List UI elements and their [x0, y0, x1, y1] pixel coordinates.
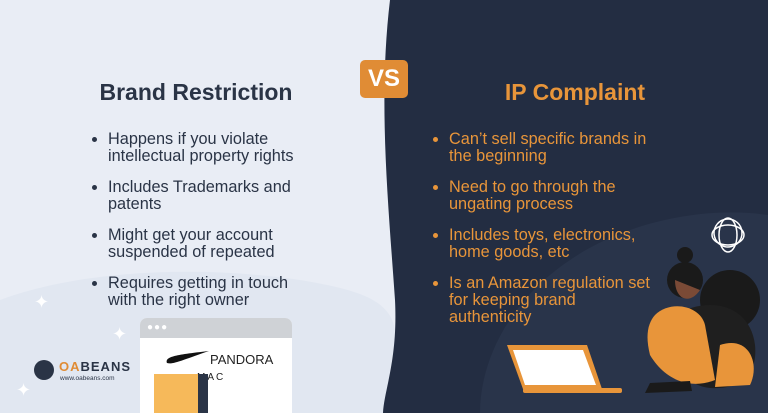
list: ip complaint points: home goods, etc — [449, 243, 569, 261]
logo — [34, 359, 131, 382]
list: ip complaint points: Need to go through the — [449, 178, 616, 196]
title: IP Complaint: IP Complaint — [505, 79, 645, 105]
browser with brands: ●●● — [147, 322, 168, 333]
list: brand restriction points: suspended of repeated — [108, 243, 275, 261]
list: brand restriction points — [92, 130, 294, 309]
list: brand restriction points: intellectual property rights — [108, 147, 294, 165]
list: brand restriction points: Might get your account — [108, 226, 273, 244]
laptop — [507, 345, 622, 393]
icon: sparkles — [16, 292, 127, 400]
vs badge: VS — [368, 65, 400, 92]
list: ip complaint points: Can’t sell specific brands in — [449, 130, 646, 148]
list: ip complaint points: ungating process — [449, 195, 573, 213]
list: brand restriction points: with the right owner — [108, 291, 249, 309]
list: ip complaint points: for keeping brand — [449, 291, 576, 309]
icon: sparkles: ✦ — [16, 380, 31, 400]
list: ip complaint points: Includes toys, electronics, — [449, 226, 635, 244]
list: brand restriction points: Happens if you violate — [108, 130, 268, 148]
illustration: sitting woman — [645, 217, 760, 393]
logo: www.oabeans.com — [60, 375, 115, 382]
list: ip complaint points: authenticity — [449, 308, 531, 326]
list: ip complaint points — [433, 130, 650, 326]
list: brand restriction points: patents — [108, 195, 161, 213]
browser with brands: MAC — [197, 372, 225, 383]
browser with brands: PANDORA — [210, 352, 273, 367]
icon: sparkles: ✦ — [112, 324, 127, 344]
vs badge — [360, 60, 408, 98]
list: ip complaint points: Is an Amazon regulation set — [449, 274, 650, 292]
list: brand restriction points: Requires getting in touch — [108, 274, 288, 292]
list: ip complaint points: the beginning — [449, 147, 547, 165]
list: brand restriction points: Includes Trademarks and — [108, 178, 291, 196]
logo: OABEANS — [59, 359, 131, 374]
browser with brands — [140, 318, 292, 413]
title: Brand Restriction: Brand Restriction — [100, 79, 292, 105]
icon: sparkles: ✦ — [34, 292, 49, 312]
